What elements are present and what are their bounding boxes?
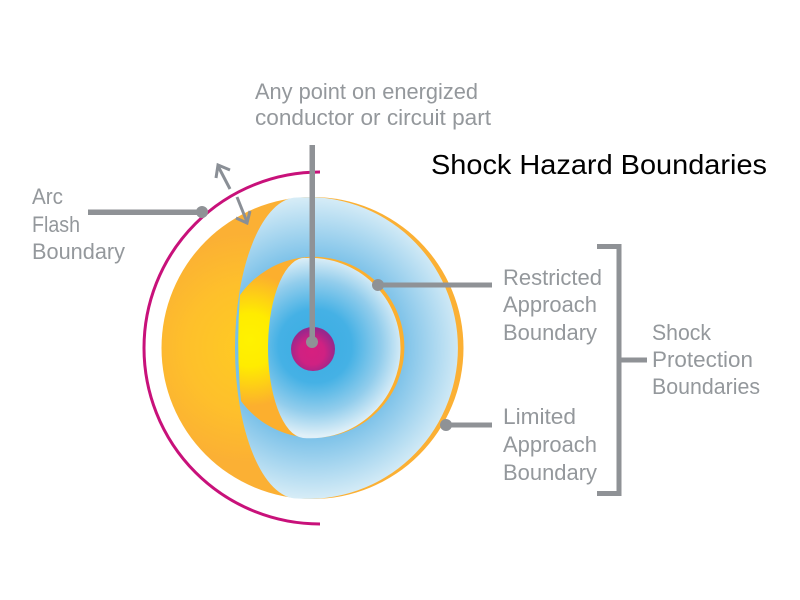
label: restricted approach boundary: Boundary: [503, 320, 597, 345]
label: arc flash boundary: Arc: [32, 184, 63, 209]
label: restricted approach boundary: Restricted: [503, 265, 602, 290]
center energized point: [291, 327, 335, 371]
outer orange sphere: [162, 197, 464, 499]
label: limited approach boundary: Boundary: [503, 460, 597, 485]
double arrow: [216, 165, 250, 223]
sphere diagram: [162, 197, 464, 499]
label: shock protection boundaries: Boundaries: [652, 374, 760, 399]
inner orange and yellow sphere section: [238, 257, 404, 438]
label: arc flash boundary: [32, 184, 125, 264]
leader line: energized point: [306, 145, 318, 348]
label: arc flash boundary: Boundary: [32, 239, 125, 264]
label: energized conductor: Any point on energized: [255, 79, 478, 104]
label: shock protection boundaries: Protection: [652, 347, 753, 372]
outer blue zone: limited approach: [235, 197, 458, 499]
label: restricted approach boundary: [503, 265, 602, 345]
title: Shock Hazard Boundaries: [431, 149, 767, 180]
label: limited approach boundary: [503, 404, 597, 485]
label: arc flash boundary: Flash: [32, 212, 80, 237]
label: shock protection boundaries: [652, 320, 760, 399]
label: limited approach boundary: Approach: [503, 432, 597, 457]
bracket: shock protection: [597, 246, 647, 494]
leader line: arc flash: [88, 206, 208, 218]
inner blue zone: restricted approach: [268, 258, 401, 438]
label: energized conductor: [255, 79, 491, 130]
label: limited approach boundary: Limited: [503, 404, 576, 429]
label: shock protection boundaries: Shock: [652, 320, 712, 345]
label: energized conductor: conductor or circuit part: [255, 105, 491, 130]
leader line: limited approach: [440, 419, 492, 431]
arc flash boundary curve: [144, 172, 320, 524]
label: restricted approach boundary: Approach: [503, 292, 597, 317]
leader line: restricted approach: [372, 279, 492, 291]
